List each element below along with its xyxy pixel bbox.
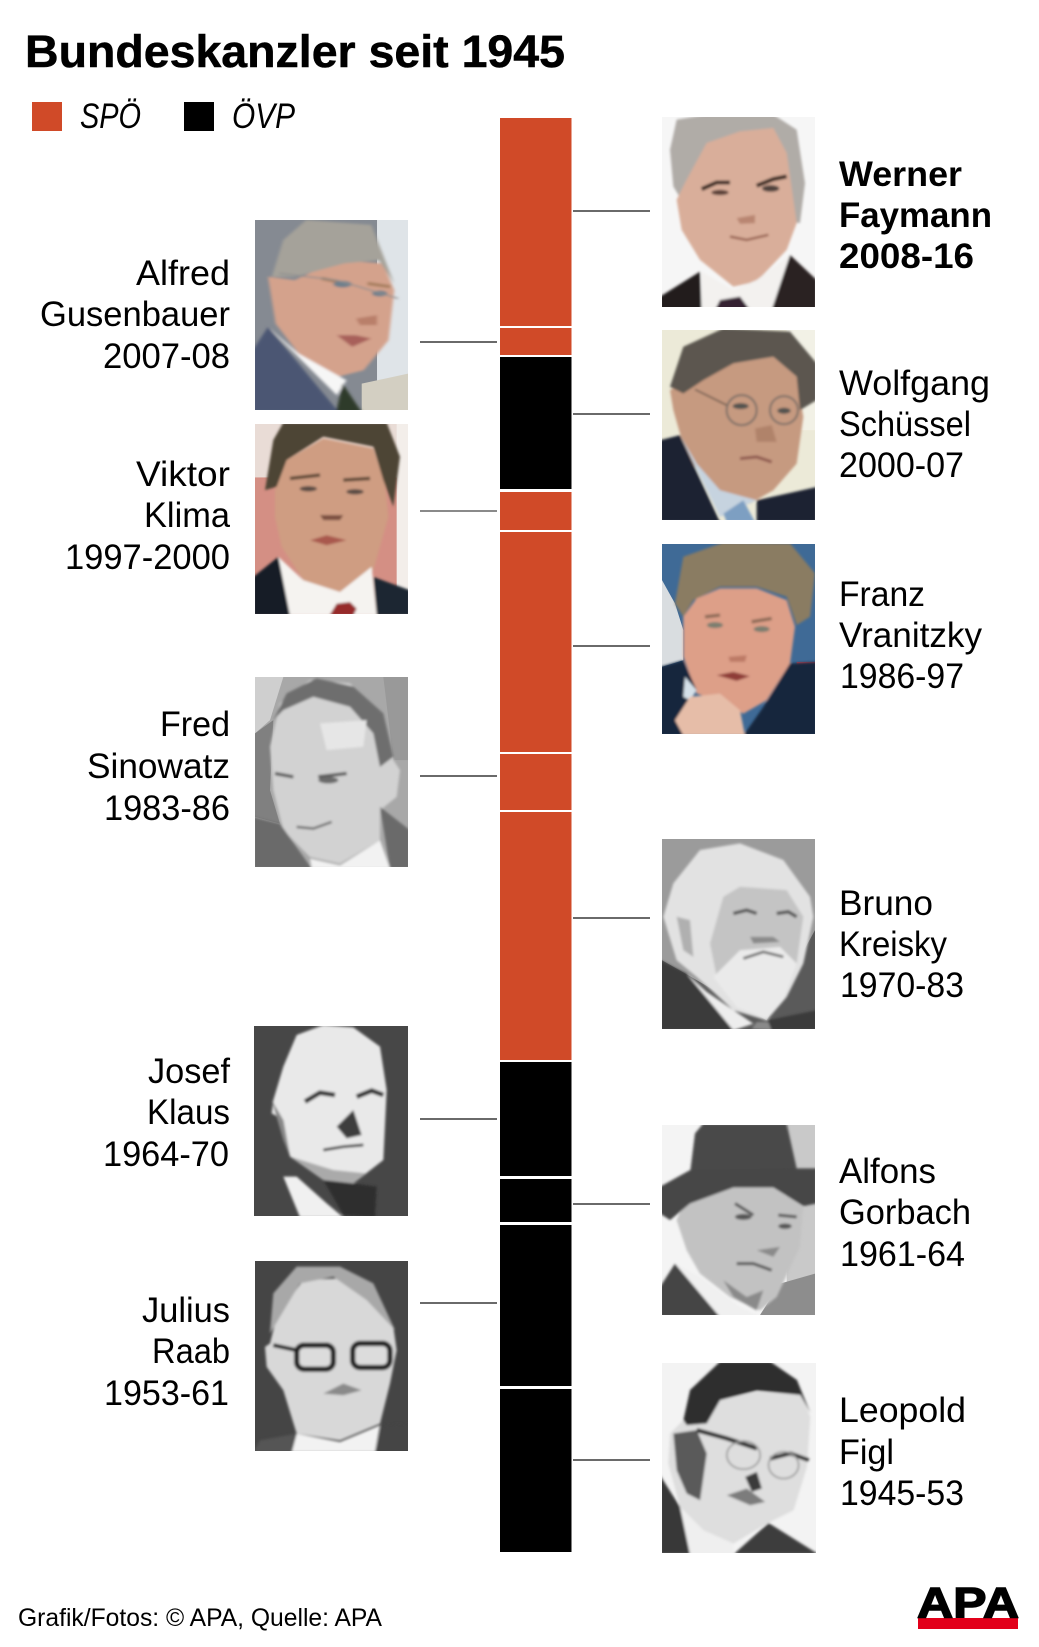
photo: Schüssel <box>662 330 815 520</box>
name: Fred Sinowatz 1983-86: 1983-86 <box>104 789 230 828</box>
name: Bruno Kreisky 1970-83: Bruno <box>839 884 933 923</box>
panel: Alfred Gusenbauer <box>40 220 497 412</box>
name: Alfons Gorbach 1961-64 <box>839 1152 971 1274</box>
name: Wolfgang Schüssel 2000-07 <box>839 364 990 485</box>
name: Franz Vranitzky 1986-97: 1986-97 <box>840 657 964 696</box>
connector: Sinowatz <box>420 775 497 777</box>
photo: Klima <box>255 424 408 614</box>
name: Alfons Gorbach 1961-64: Gorbach <box>839 1193 971 1232</box>
name: Josef Klaus 1964-70: 1964-70 <box>103 1135 229 1174</box>
panel: Bruno Kreisky <box>573 839 964 1030</box>
photo: Klaus <box>254 1026 408 1216</box>
name: Julius Raab 1953-61: Raab <box>152 1332 230 1371</box>
name: Leopold Figl 1945-53: 1945-53 <box>840 1474 964 1513</box>
name: Julius Raab 1953-61: Julius <box>142 1291 230 1330</box>
segment: Raab <box>500 1225 572 1386</box>
name: Alfons Gorbach 1961-64: Alfons <box>839 1152 936 1191</box>
name: Julius Raab 1953-61: 1953-61 <box>104 1374 229 1413</box>
connector: Raab <box>420 1302 497 1304</box>
name: Julius Raab 1953-61 <box>104 1291 230 1413</box>
name: Werner Faymann 2008-16 <box>839 155 992 276</box>
legend swatch: ÖVP <box>184 102 214 131</box>
name: Fred Sinowatz 1983-86: Fred <box>160 705 230 744</box>
name: Fred Sinowatz 1983-86: Sinowatz <box>87 747 230 786</box>
timeline bar <box>500 118 572 1552</box>
legend label: ÖVP: ÖVP <box>232 97 296 136</box>
logo letters: APA <box>917 1580 1019 1628</box>
segment: Klaus <box>500 1062 572 1176</box>
connector: Faymann <box>573 210 650 212</box>
logo red band <box>918 1618 1018 1629</box>
name: Franz Vranitzky 1986-97: Franz <box>839 575 925 614</box>
name: Franz Vranitzky 1986-97: Vranitzky <box>839 616 982 655</box>
segment: Gusenbauer <box>500 328 572 355</box>
name: Alfred Gusenbauer 2007-08: Alfred <box>136 254 230 293</box>
panel: Franz Vranitzky <box>573 543 982 736</box>
photo: Sinowatz <box>255 677 408 867</box>
legend swatch: SPÖ <box>32 102 62 131</box>
title: Bundeskanzler seit 1945 <box>25 26 565 77</box>
panel: Leopold Figl <box>573 1362 966 1554</box>
photo: Figl <box>662 1363 816 1553</box>
name: Viktor Klima 1997-2000: Viktor <box>136 455 230 494</box>
name: Alfred Gusenbauer 2007-08: 2007-08 <box>103 337 230 376</box>
segment: Kreisky <box>500 812 572 1060</box>
name: Josef Klaus 1964-70 <box>103 1052 230 1174</box>
name: Werner Faymann 2008-16: Faymann <box>839 196 992 235</box>
name: Wolfgang Schüssel 2000-07: 2000-07 <box>839 446 964 485</box>
name: Bruno Kreisky 1970-83: 1970-83 <box>840 966 964 1005</box>
name: Viktor Klima 1997-2000: Klima <box>144 496 231 535</box>
panel: Josef Klaus <box>103 1025 497 1217</box>
photo: Gusenbauer <box>255 220 408 410</box>
name: Josef Klaus 1964-70: Klaus <box>147 1093 230 1132</box>
connector: Klima <box>420 510 497 512</box>
name: Bruno Kreisky 1970-83 <box>839 884 964 1005</box>
connector: Gorbach <box>573 1203 650 1205</box>
photo: Kreisky <box>662 839 815 1029</box>
source credit: Grafik/Fotos: © APA, Quelle: APA <box>18 1604 382 1632</box>
name: Leopold Figl 1945-53 <box>839 1391 966 1513</box>
name: Leopold Figl 1945-53: Figl <box>839 1433 894 1472</box>
name: Viktor Klima 1997-2000 <box>65 455 231 577</box>
segment: Figl <box>500 1389 572 1552</box>
name: Wolfgang Schüssel 2000-07: Schüssel <box>839 405 971 444</box>
name: Josef Klaus 1964-70: Josef <box>148 1052 230 1091</box>
connector: Vranitzky <box>573 645 650 647</box>
name: Alfred Gusenbauer 2007-08: Gusenbauer <box>40 295 230 334</box>
segment: Klima <box>500 492 572 530</box>
connector: Figl <box>573 1459 650 1461</box>
panel: Fred Sinowatz <box>87 677 497 869</box>
panel: Wolfgang Schüssel <box>573 328 990 522</box>
panel: Werner Faymann <box>573 115 992 310</box>
connector: Gusenbauer <box>420 341 497 343</box>
segment: Faymann <box>500 118 572 326</box>
name: Wolfgang Schüssel 2000-07: Wolfgang <box>839 364 990 403</box>
connector: Klaus <box>420 1118 497 1120</box>
legend <box>32 97 296 136</box>
logo: APA <box>917 1580 1019 1629</box>
segment: Schüssel <box>500 357 572 489</box>
name: Fred Sinowatz 1983-86 <box>87 705 230 828</box>
segment: Sinowatz <box>500 754 572 810</box>
name: Alfons Gorbach 1961-64: 1961-64 <box>840 1235 965 1274</box>
panel: Alfons Gorbach <box>573 1123 971 1317</box>
photo: Raab <box>255 1261 408 1451</box>
photo: Vranitzky <box>662 544 815 734</box>
name: Viktor Klima 1997-2000: 1997-2000 <box>65 538 230 577</box>
photo: Gorbach <box>662 1125 815 1315</box>
segment: Gorbach <box>500 1179 572 1222</box>
name: Leopold Figl 1945-53: Leopold <box>839 1391 966 1430</box>
panel: Julius Raab <box>104 1261 497 1452</box>
name: Bruno Kreisky 1970-83: Kreisky <box>839 925 947 964</box>
connector: Schüssel <box>573 413 650 415</box>
photo: Faymann <box>662 117 815 307</box>
segment: Vranitzky <box>500 532 572 752</box>
name: Werner Faymann 2008-16: 2008-16 <box>839 237 974 276</box>
name: Franz Vranitzky 1986-97 <box>839 575 982 696</box>
name: Alfred Gusenbauer 2007-08 <box>40 254 230 376</box>
panel: Viktor Klima <box>65 423 497 616</box>
connector: Kreisky <box>573 917 650 919</box>
legend label: SPÖ: SPÖ <box>80 97 141 136</box>
name: Werner Faymann 2008-16: Werner <box>839 155 962 194</box>
